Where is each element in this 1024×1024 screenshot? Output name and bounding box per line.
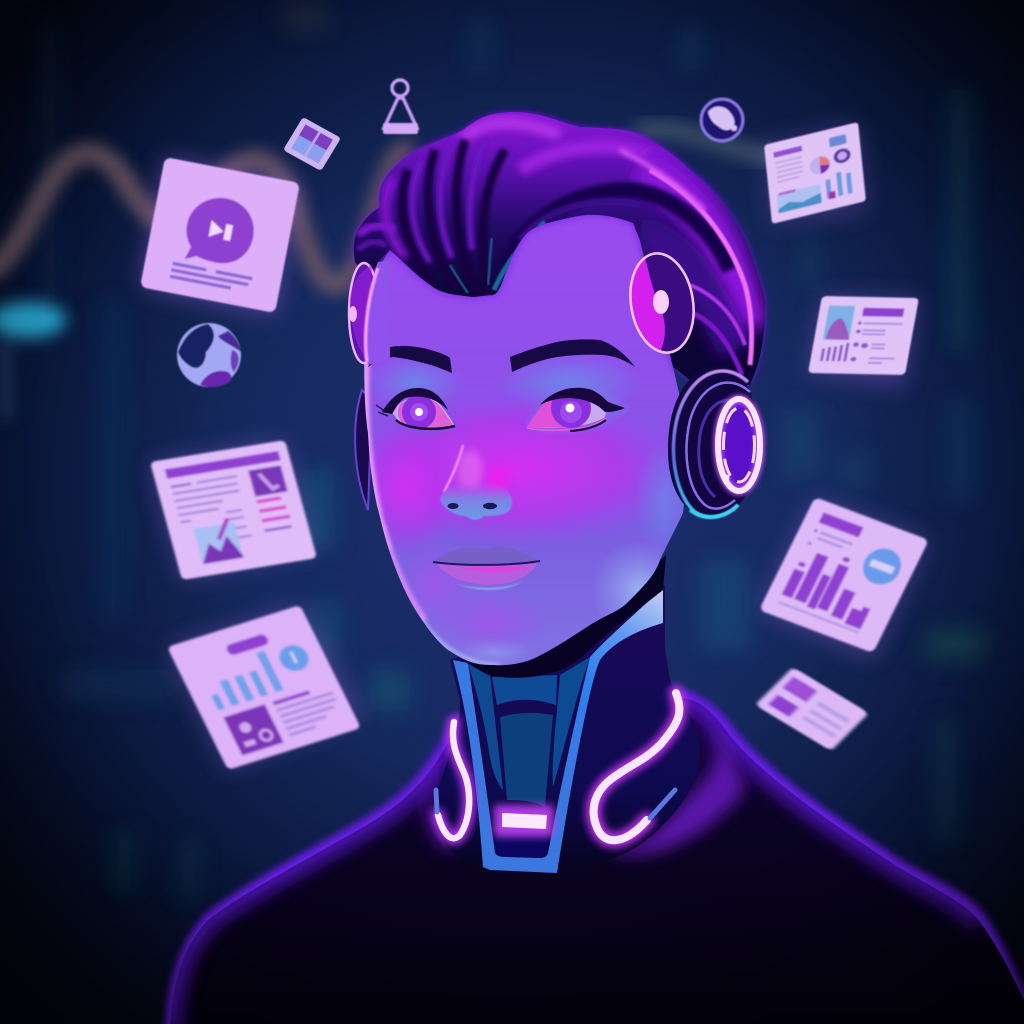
card: small blurred card xyxy=(755,667,869,751)
card: bar chart with speech bubble xyxy=(167,605,363,770)
blue collar band xyxy=(453,587,663,873)
glowing tube right xyxy=(436,693,679,840)
figure: face xyxy=(335,215,695,666)
figure: right eye xyxy=(527,382,628,433)
figure: lips xyxy=(433,546,540,590)
card: chat message xyxy=(140,157,300,316)
top crown highlights xyxy=(462,123,560,138)
figure: under-chin shadow xyxy=(465,555,666,678)
text lines xyxy=(170,262,253,293)
figure: left eye xyxy=(376,388,458,436)
figure: hair xyxy=(354,112,765,385)
light-up bar xyxy=(494,805,554,837)
figure: eyebrows xyxy=(368,339,635,373)
figure: collar neck xyxy=(435,585,700,873)
card: small picture card xyxy=(283,117,341,171)
device: right temple disc xyxy=(624,249,700,357)
collar inner panels xyxy=(468,663,503,790)
icon: globe top right xyxy=(701,99,743,141)
background: cyan blur blob xyxy=(0,302,66,420)
card: report with chart and list xyxy=(150,440,317,580)
left lobe ridges xyxy=(402,170,435,285)
glowing tube left xyxy=(438,722,469,838)
figure: left ear cup xyxy=(355,390,372,510)
figure: torso xyxy=(165,690,1024,1024)
background: glowing data wave xyxy=(0,129,770,285)
icon: globe left xyxy=(177,323,241,387)
icon: speech bubble with skip symbol xyxy=(180,192,259,271)
card: profile with list xyxy=(808,296,919,388)
device: headphone earcup xyxy=(668,364,762,518)
card: dashboard top right xyxy=(764,122,867,224)
device: left temple disc xyxy=(349,260,390,365)
icon: flask beacon xyxy=(383,80,418,134)
teal hair glints xyxy=(450,265,468,293)
figure: nose xyxy=(440,445,512,520)
card: large bar chart xyxy=(759,497,929,660)
right sweep body xyxy=(640,165,748,330)
